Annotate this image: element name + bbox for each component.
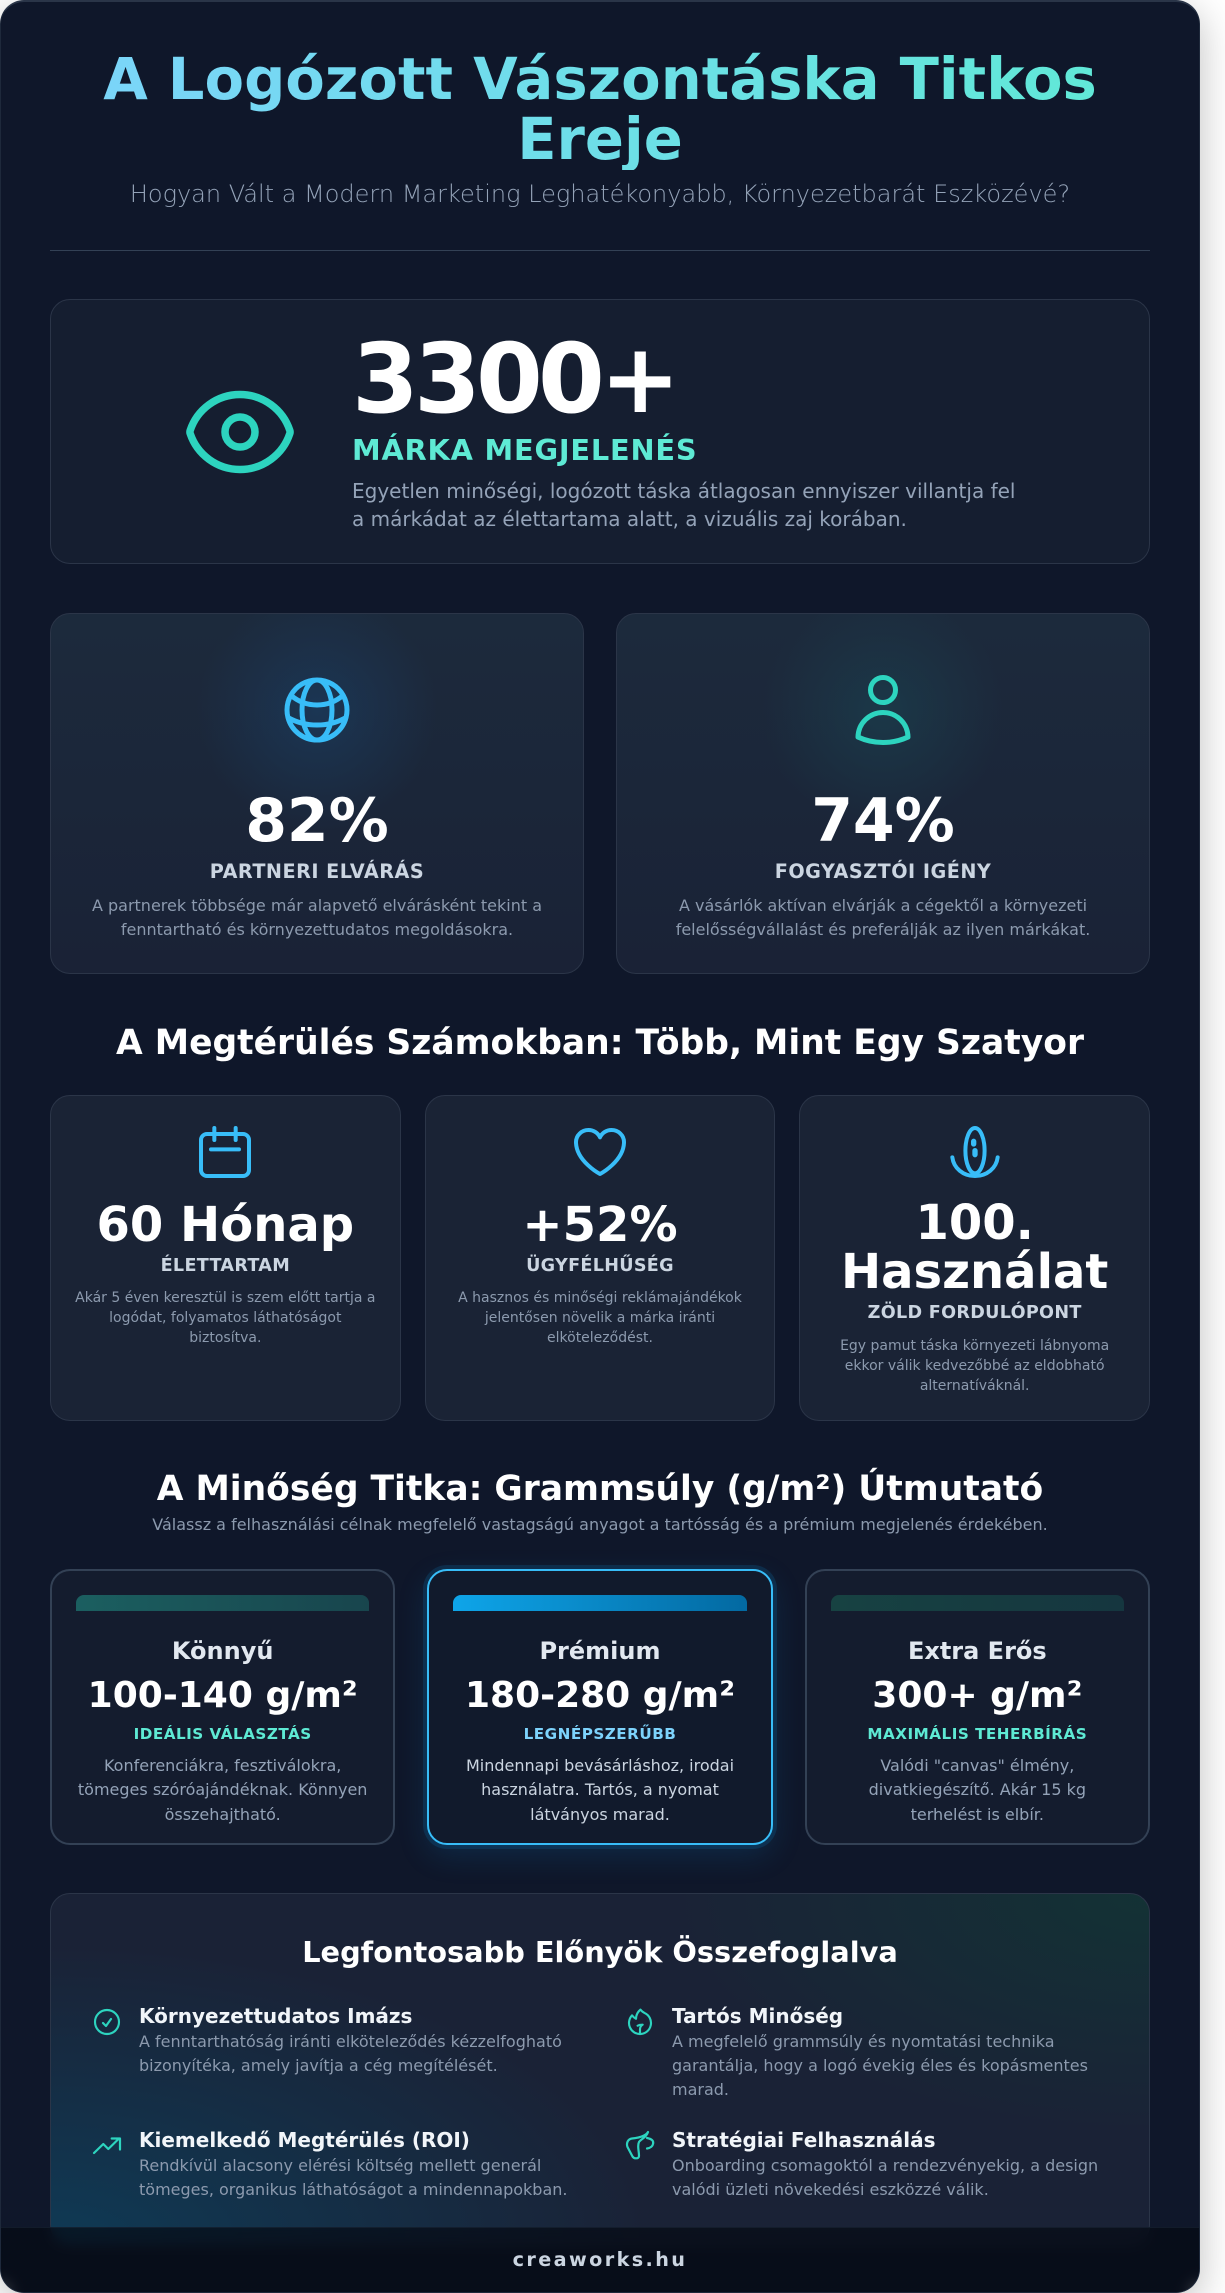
description: [458, 1290, 742, 1346]
section heading: ROI: A Megtérülés Számokban: Több, Mint Egy Szatyor: [116, 1023, 1084, 1063]
panel: premium grammage: [427, 1569, 773, 1845]
stat description: a márkádat az élettartama alatt, a vizuális zaj korában.: [352, 507, 907, 531]
icon: flame: [628, 2008, 652, 2036]
panel: light grammage: [50, 1569, 395, 1845]
value: Használat: [841, 1244, 1108, 1300]
colour bar: [453, 1595, 747, 1611]
stat description: A partnerek többsége már alapvető elvárásként tekint a: [92, 896, 542, 915]
benefit text: [672, 2156, 1098, 2199]
stat description: [676, 896, 1090, 939]
panel: partner expectation: [50, 613, 584, 974]
icon: heart: [574, 1128, 626, 1176]
stat description: [352, 479, 1015, 531]
benefit text: A fenntarthatóság iránti elköteleződés kézzelfogható: [139, 2032, 562, 2051]
description: biztosítva.: [189, 1330, 261, 1346]
tier name: Könnyű: [172, 1637, 273, 1665]
colour bar: [76, 1595, 369, 1611]
tier description: látványos marad.: [530, 1805, 670, 1824]
panel: lifespan: [50, 1095, 401, 1421]
stat label: MÁRKA MEGJELENÉS: [352, 433, 697, 467]
tier description: tömeges szóróajándéknak. Könnyen: [78, 1780, 367, 1799]
panel: 3300+ hero stat: [50, 299, 1150, 564]
stat label: PARTNERI ELVÁRÁS: [210, 860, 424, 883]
tier description: összehajtható.: [165, 1805, 281, 1824]
benefit: ROI: [92, 2128, 568, 2199]
tier description: Mindennapi bevásárláshoz, irodai: [466, 1756, 734, 1775]
summary heading: Legfontosabb Előnyök Összefoglalva: [302, 1935, 898, 1969]
benefit: strategic use: [626, 2128, 1098, 2199]
benefit text: A megfelelő grammsúly és nyomtatási technika: [672, 2032, 1055, 2051]
icon: megaphone: [626, 2130, 654, 2160]
colour bar: [831, 1595, 1124, 1611]
stat description: felelősségvállalást és preferálják az ilyen márkákat.: [676, 920, 1090, 939]
stat description: fenntartható és környezettudatos megoldásokra.: [121, 920, 513, 939]
benefit text: Onboarding csomagoktól a rendezvényekig, a design: [672, 2156, 1098, 2175]
tier tag: MAXIMÁLIS TEHERBÍRÁS: [867, 1725, 1087, 1743]
benefit text: [139, 2032, 562, 2075]
tier name: Prémium: [539, 1637, 660, 1665]
title: Ereje: [517, 106, 683, 173]
benefit text: garantálja, hogy a logó évekig éles és kopásmentes: [672, 2056, 1088, 2075]
title: [0, 50, 1200, 170]
tier value: 300+ g/m²: [872, 1675, 1082, 1716]
tier description: [466, 1756, 734, 1824]
icon: user: [856, 675, 910, 745]
benefit title: Környezettudatos Imázs: [139, 2004, 412, 2028]
panel: customer loyalty: [425, 1095, 775, 1421]
description: elköteleződést.: [547, 1330, 653, 1346]
label: ÉLETTARTAM: [161, 1256, 290, 1276]
icon: trending up: [92, 2137, 122, 2154]
icon: sprout: [950, 1126, 1000, 1178]
panel: extra strong grammage: [805, 1569, 1150, 1845]
benefit text: valódi üzleti növekedési eszközzé válik.: [672, 2180, 989, 2199]
tier description: Konferenciákra, fesztiválokra,: [104, 1756, 341, 1775]
benefit text: Rendkívül alacsony elérési költség mellett generál: [139, 2156, 541, 2175]
stat number: 82%: [245, 786, 389, 856]
panel: consumer demand: [616, 613, 1150, 974]
tier description: divatkiegészítő. Akár 15 kg: [869, 1780, 1086, 1799]
description: Egy pamut táska környezeti lábnyoma: [840, 1338, 1109, 1354]
description: logódat, folyamatos láthatóságot: [109, 1310, 341, 1326]
description: jelentősen növelik a márka iránti: [485, 1310, 715, 1326]
benefit title: Tartós Minőség: [672, 2004, 843, 2028]
benefit text: tömeges, organikus láthatóságot a mindennapokban.: [139, 2180, 568, 2199]
panel: green turning point: [799, 1095, 1150, 1421]
icon: eye: [186, 390, 294, 474]
tier description: [78, 1756, 367, 1824]
value: [841, 1195, 1108, 1300]
description: ekkor válik kedvezőbbé az eldobható: [845, 1358, 1105, 1374]
tier description: Valódi "canvas" élmény,: [880, 1756, 1074, 1775]
footer: [0, 2227, 1200, 2293]
benefit title: Kiemelkedő Megtérülés (ROI): [139, 2128, 470, 2152]
section subheading: Válassz a felhasználási célnak megfelelő vastagságú anyagot a tartósság és a prémium megjelenés érdekében.: [152, 1515, 1048, 1534]
description: [75, 1290, 376, 1346]
benefit title: Stratégiai Felhasználás: [672, 2128, 935, 2152]
tier value: 100-140 g/m²: [88, 1675, 358, 1716]
title: A Logózott Vászontáska Titkos: [103, 46, 1097, 113]
description: [840, 1338, 1109, 1394]
tier tag: LEGNÉPSZERŰBB: [524, 1725, 676, 1743]
tier description: terhelést is elbír.: [911, 1805, 1044, 1824]
description: alternatíváknál.: [920, 1378, 1030, 1394]
value: +52%: [522, 1197, 678, 1253]
label: ÜGYFÉLHŰSÉG: [526, 1256, 674, 1276]
footer brand: creaworks.hu: [513, 2248, 687, 2271]
subtitle: Hogyan Vált a Modern Marketing Leghatékonyabb, Környezetbarát Eszközévé?: [130, 180, 1070, 208]
stat number: 74%: [811, 786, 955, 856]
panel: summary of benefits: [50, 1893, 1150, 2245]
tier value: 180-280 g/m²: [465, 1675, 735, 1716]
description: A hasznos és minőségi reklámajándékok: [458, 1290, 742, 1306]
tier tag: IDEÁLIS VÁLASZTÁS: [134, 1725, 312, 1743]
value: 60 Hónap: [97, 1197, 354, 1253]
icon: check circle: [94, 2008, 120, 2036]
benefit text: bizonyítéka, amely javítja a cég megítélését.: [139, 2056, 498, 2075]
stat description: [92, 896, 542, 939]
tier name: Extra Erős: [908, 1637, 1047, 1665]
icon: calendar: [199, 1126, 251, 1178]
benefit: eco image: [94, 2004, 562, 2075]
stat label: FOGYASZTÓI IGÉNY: [775, 860, 991, 883]
benefit text: [139, 2156, 568, 2199]
benefit: durable quality: [628, 2004, 1088, 2099]
stat description: Egyetlen minőségi, logózott táska átlagosan ennyiszer villantja fel: [352, 479, 1015, 503]
tier description: használatra. Tartós, a nyomat: [481, 1780, 719, 1799]
benefit text: marad.: [672, 2080, 729, 2099]
stat description: A vásárlók aktívan elvárják a cégektől a környezeti: [679, 896, 1087, 915]
benefit text: [672, 2032, 1088, 2099]
description: Akár 5 éven keresztül is szem előtt tartja a: [75, 1290, 376, 1306]
section heading: grammage: A Minőség Titka: Grammsúly (g/m²) Útmutató: [157, 1469, 1043, 1509]
stat number: 3300+: [352, 323, 676, 435]
label: ZÖLD FORDULÓPONT: [868, 1303, 1082, 1323]
tier description: [869, 1756, 1086, 1824]
icon: globe: [284, 678, 350, 742]
value: 100.: [915, 1195, 1034, 1251]
